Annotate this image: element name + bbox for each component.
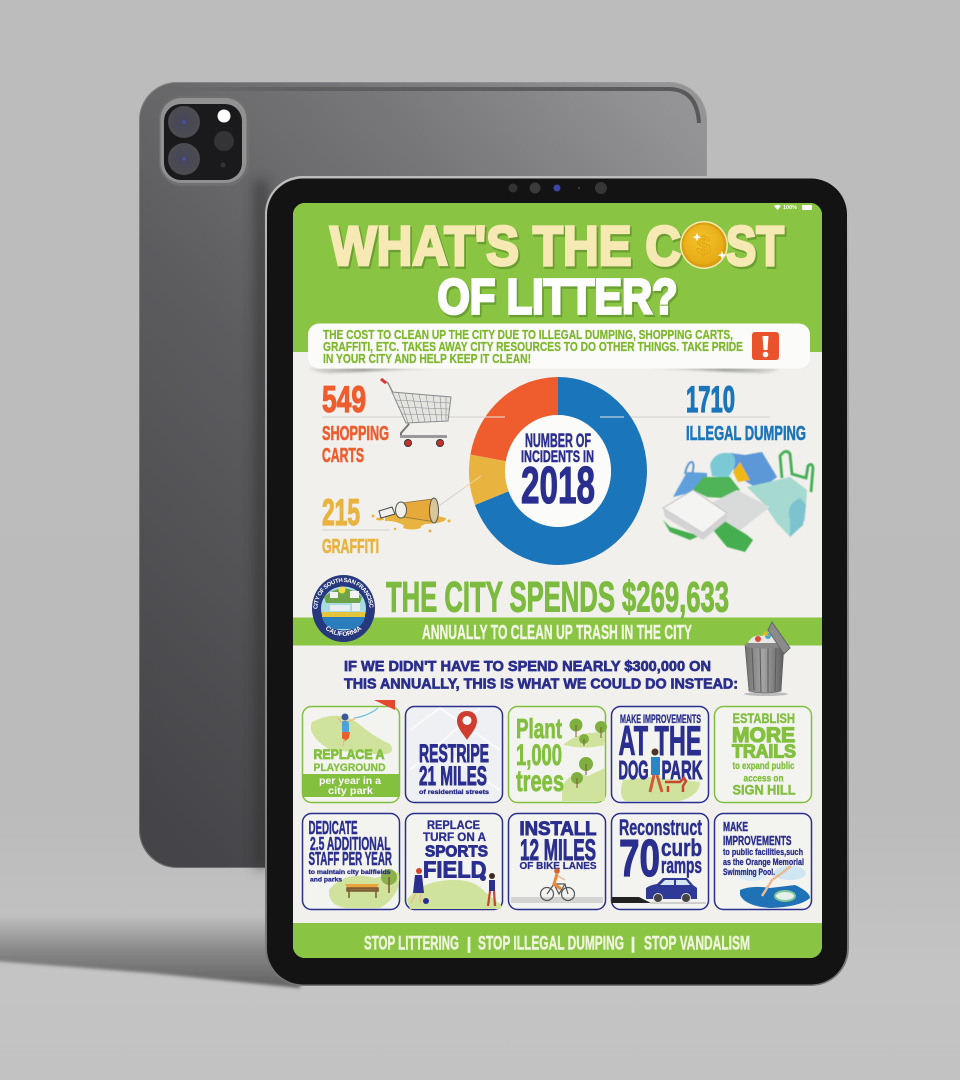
card: dedicate staff: and parks [310,876,342,884]
stat: illegal dumping [686,385,806,440]
stat: shopping carts: 549 [322,379,366,420]
footer band: | [467,934,471,953]
intro box: GRAFFITI, ETC. TAKES AWAY CITY RESOURCES TO DO OTHER THINGS. TAKE PRIDE [323,339,743,354]
card: replace a playground: PLAYGROUND [314,762,386,774]
card: swimming pool: to public facilities,such [723,847,803,858]
city seal [312,575,375,642]
green band: ANNUALLY TO CLEAN UP TRASH IN THE CITY [422,622,692,644]
icon: alert [752,332,779,360]
title line one [328,224,786,270]
card: replace a playground: per year in a [319,775,381,787]
footer band: STOP ILLEGAL DUMPING [478,934,624,954]
card: plant trees: trees [516,765,564,798]
card: dedicate staff: DEDICATE [308,818,358,838]
card: swimming pool: IMPROVEMENTS [723,833,792,848]
title line one: WHAT'S THE C [330,214,681,277]
child [338,714,356,746]
front tablet frame [265,176,849,986]
city seal: CALIFORNIA [326,626,362,636]
card: sports field [406,814,502,910]
green header [293,203,822,352]
stat: shopping carts: CARTS [322,444,364,467]
kite [374,700,395,710]
dog walker [650,748,686,792]
card: restripe: of residential streets [419,789,489,796]
icon: gold coin: $ [696,230,711,260]
stat: shopping carts [322,385,388,462]
tablet floor shadow [0,915,300,988]
icon: shopping cart [381,379,451,446]
card: replace a playground: REPLACE A [314,747,385,762]
screen infographic [293,203,822,958]
card: curb ramps: Reconstruct [619,815,702,840]
green band [293,618,822,646]
title line one: WHAT'S THE C [332,216,682,279]
car [646,878,697,902]
card: plant trees: 1,000 [516,739,562,772]
card: dedicate staff [302,814,400,910]
instead statement [344,658,738,692]
card: plant trees [508,706,607,802]
card: plant trees: Plant [516,713,562,744]
card: swimming pool: MAKE [723,820,748,834]
card: bike lanes: 12 MILES [520,834,596,867]
card: swimming pool: Swimming Pool. [723,867,775,878]
icon: spilled paint can [372,498,450,532]
card: bike lanes: OF BIKE LANES [520,860,596,872]
donut centre label [522,433,594,504]
card: replace a playground [302,700,400,802]
card: more trails: SIGN HILL [732,782,796,798]
footer band [293,923,822,958]
card: dedicate staff: STAFF PER YEAR [308,849,392,869]
card: sports field: FIELD [423,856,486,882]
cyclist [540,868,574,900]
headline: the city spends: THE CITY SPENDS $269,633 [386,574,729,622]
card: sports field: TURF ON A [423,830,486,844]
camera module [159,96,249,186]
instead statement: THIS ANNUALLY, THIS IS WHAT WE COULD DO INSTEAD: [344,676,738,692]
stat: illegal dumping: ILLEGAL DUMPING [686,422,806,445]
card: replace a playground: city park [328,785,373,797]
stat: graffiti [322,498,378,554]
leader lines [322,417,770,530]
icon: pile of plastic bags [663,451,813,552]
front tablet shadow on back [254,180,268,868]
card: dedicate staff: 2.5 ADDITIONAL [310,834,391,854]
card: curb ramps: 70 [619,830,660,888]
footer band: STOP LITTERING [364,934,459,954]
title line two: OF LITTER? [439,272,679,326]
title line one: ST [728,216,786,279]
instead statement: IF WE DIDN'T HAVE TO SPEND NEARLY $300,000 ON [344,658,711,675]
card: dog park: AT THE [618,717,702,764]
card: dog park [612,706,708,802]
stat: graffiti: 215 [322,492,360,533]
icon: trash can [744,622,790,696]
card: swimming pool [714,814,812,910]
intro box [308,324,810,368]
card: dog park: MAKE IMPROVEMENTS [620,712,701,726]
back of tablet [139,82,707,868]
card: dedicate staff: to maintain city ballfields [308,869,391,876]
card: swimming pool: as the Orange Memorial [723,857,804,868]
card: restripe: 21 MILES [419,761,487,791]
card: sports field: SPORTS [425,844,488,860]
card: restripe: RESTRIPE [419,740,489,768]
donut centre label: 2018 [521,457,595,515]
card: more trails: access on [744,774,784,784]
intro box: IN YOUR CITY AND HELP KEEP IT CLEAN! [323,351,531,366]
status bar: 100% [783,205,797,211]
footer band: | [631,934,635,953]
title line one: ST [726,214,784,277]
status bar [774,204,812,210]
stat: graffiti: GRAFFITI [322,535,379,558]
card: dog park: PARK [662,755,703,785]
card: bike lanes [508,814,606,910]
stat: illegal dumping: 1710 [686,379,735,420]
card: curb ramps: curb [661,835,702,862]
card: curb ramps [612,814,708,910]
stat: shopping carts: SHOPPING [322,422,389,445]
card: more trails: MORE [732,723,795,747]
intro box shadow [309,368,780,373]
footer band: STOP VANDALISM [644,934,750,954]
card: more trails: to expand public [732,761,795,772]
card: more trails [714,706,812,802]
card: more trails: ESTABLISH [732,711,795,726]
card: curb ramps: ramps [661,853,702,878]
donut chart [464,377,647,565]
swimmer [762,866,791,896]
donut centre label: INCIDENTS IN [521,448,594,466]
icon: map pin [457,711,477,740]
card: dog park: DOG [618,755,648,785]
donut centre label: NUMBER OF [525,431,591,452]
front camera dots [508,182,607,194]
card: sports field: REPLACE [427,820,480,832]
card: more trails: TRAILS [732,740,796,762]
title line two [438,278,678,318]
players [411,868,495,906]
intro box: THE COST TO CLEAN UP THE CITY DUE TO ILLEGAL DUMPING, SHOPPING CARTS, [323,327,733,342]
card: bike lanes: INSTALL [520,819,597,840]
icon: gold coin [680,221,728,269]
title line two: OF LITTER? [438,270,678,324]
card: restripe [406,706,502,802]
city seal: CITY OF SOUTH SAN FRANCISCO [313,578,374,609]
